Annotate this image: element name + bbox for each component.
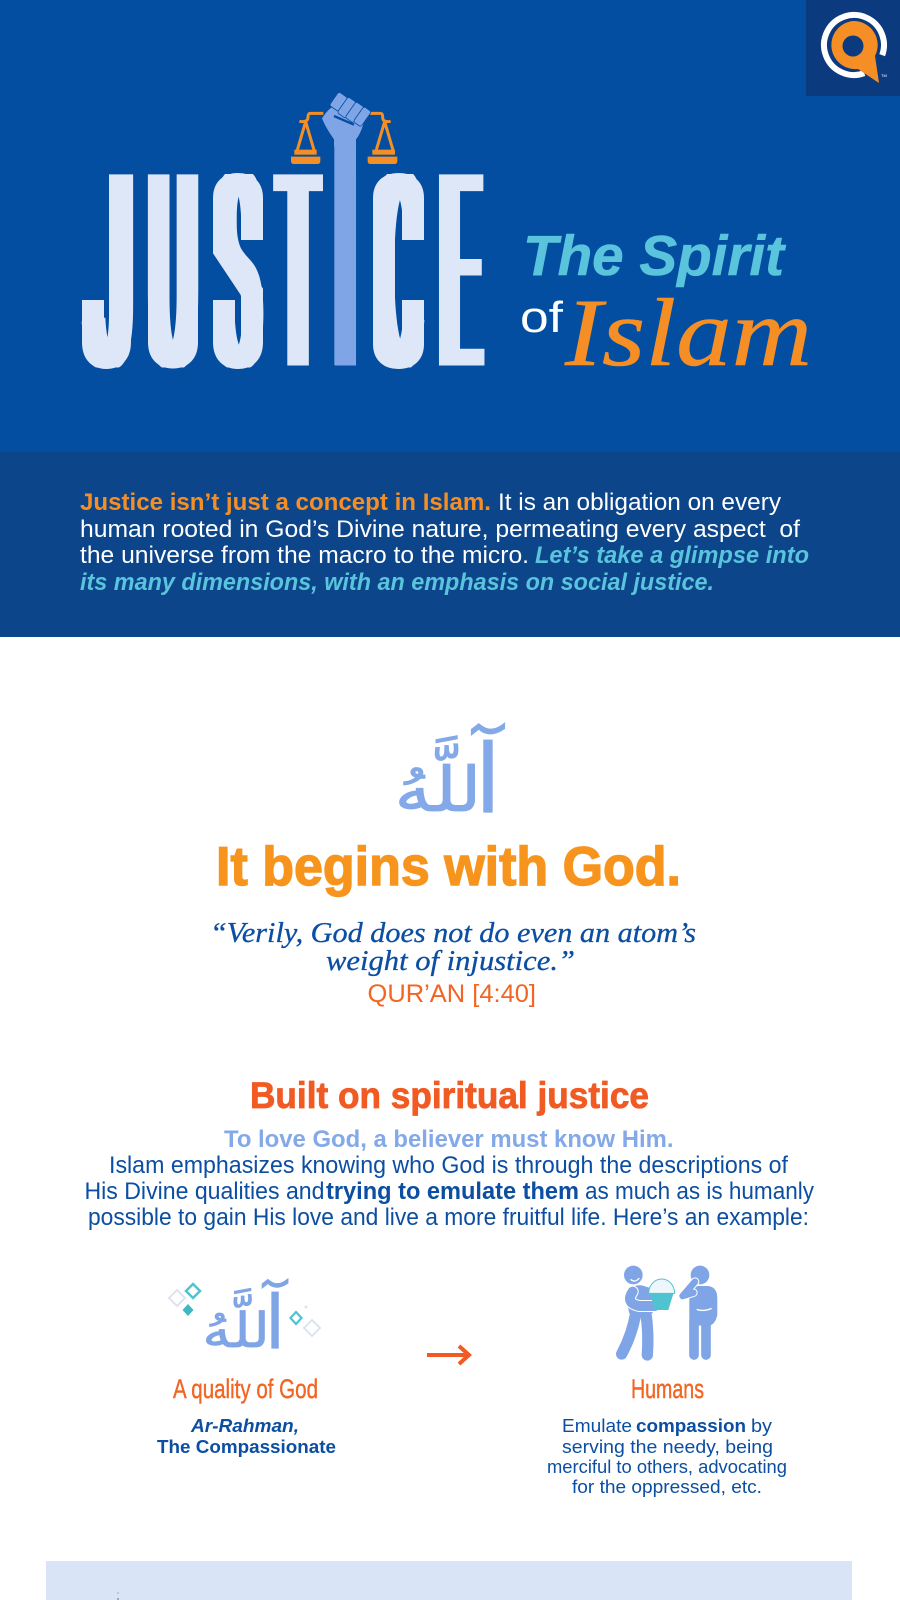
icon: Allah calligraphy: آ [471,722,505,835]
text block: intro: Let’s take a glimpse into [535,542,809,569]
text block: Emulate compassion: compassion [636,1415,746,1436]
text block: spiritual justice: possible to gain His love and live a more fruitful life. Here’s an example: [88,1204,809,1231]
label: A quality of God: A quality of God [173,1374,318,1404]
panel: intro band [0,452,900,637]
title: JUSTICE wordmark: I [338,111,353,429]
title: JUSTICE wordmark: J [88,110,132,429]
subtitle: of: of [520,293,564,342]
panel: logo: TM [881,73,887,78]
title: JUSTICE wordmark: S [219,110,258,429]
icon: person giving basket to another person [622,1266,717,1357]
text block: spiritual justice [84,1126,814,1231]
panel: bottom section [46,1561,852,1600]
text block: Emulate compassion: serving the needy, being [562,1436,773,1457]
icon: Allah calligraphy with sparkles: للَّهُ [202,1288,270,1359]
text block: spiritual justice: His Divine qualities and [84,1178,324,1205]
text block: spiritual justice: Islam emphasizes knowing who God is through the descriptions of [109,1152,788,1179]
text block: spiritual justice: trying to emulate them [326,1178,579,1205]
quote: “Verily, God does not do even an atom’s [210,917,696,949]
icon: Allah calligraphy with sparkles [169,1278,320,1366]
text block: spiritual justice: as much as is humanly [585,1178,814,1205]
title: JUSTICE wordmark: E [442,111,479,429]
title: JUSTICE wordmark [80,109,479,429]
title: JUSTICE wordmark: U [151,109,195,429]
text block: intro: human rooted in God’s Divine nature, permeating every aspect of [80,516,800,543]
icon: raised fist arm [322,92,371,365]
heading: Built on spiritual justice: Built on spiritual justice [250,1075,649,1116]
icon: Allah calligraphy [394,722,505,835]
text block: Emulate compassion [547,1415,787,1497]
arrow [427,1346,469,1364]
heading: It begins with God: It begins with God. [216,835,681,897]
text block: intro: the universe from the macro to the micro. [80,542,529,569]
subtitle: The Spirit: The Spirit [523,224,786,288]
text block: Emulate compassion: by [751,1415,773,1436]
text block: intro: its many dimensions, with an emphasis on social justice. [80,569,714,596]
panel: header background [0,0,900,452]
label: Humans: Humans [631,1374,704,1404]
text block: intro [80,489,809,596]
quote source: QUR’AN [4:40] [368,980,536,1008]
text block: intro: It is an obligation on every [498,489,781,516]
title: JUSTICE wordmark: C [378,110,419,429]
quote: weight of injustice.” [326,945,575,977]
label: The Compassionate: The Compassionate [157,1436,336,1457]
title: JUSTICE wordmark: T [280,111,316,429]
text block: Emulate compassion: for the oppressed, etc. [572,1476,762,1497]
icon: Allah calligraphy: للَّهُ [394,735,482,826]
text block: intro: Justice isn’t just a concept in Islam. [80,489,491,516]
text block: spiritual justice: To love God, a believer must know Him. [224,1126,674,1153]
quote [210,917,696,977]
text block: Emulate compassion: merciful to others, advocating [547,1456,787,1477]
panel: logo [806,0,900,96]
icon: scales of justice [291,113,397,164]
label: Ar-Rahman: Ar-Rahman, [190,1415,299,1436]
icon: Allah calligraphy with sparkles: آ [262,1278,289,1366]
text block: Emulate compassion: Emulate [562,1415,632,1436]
subtitle: Islam: Islam [564,279,812,386]
